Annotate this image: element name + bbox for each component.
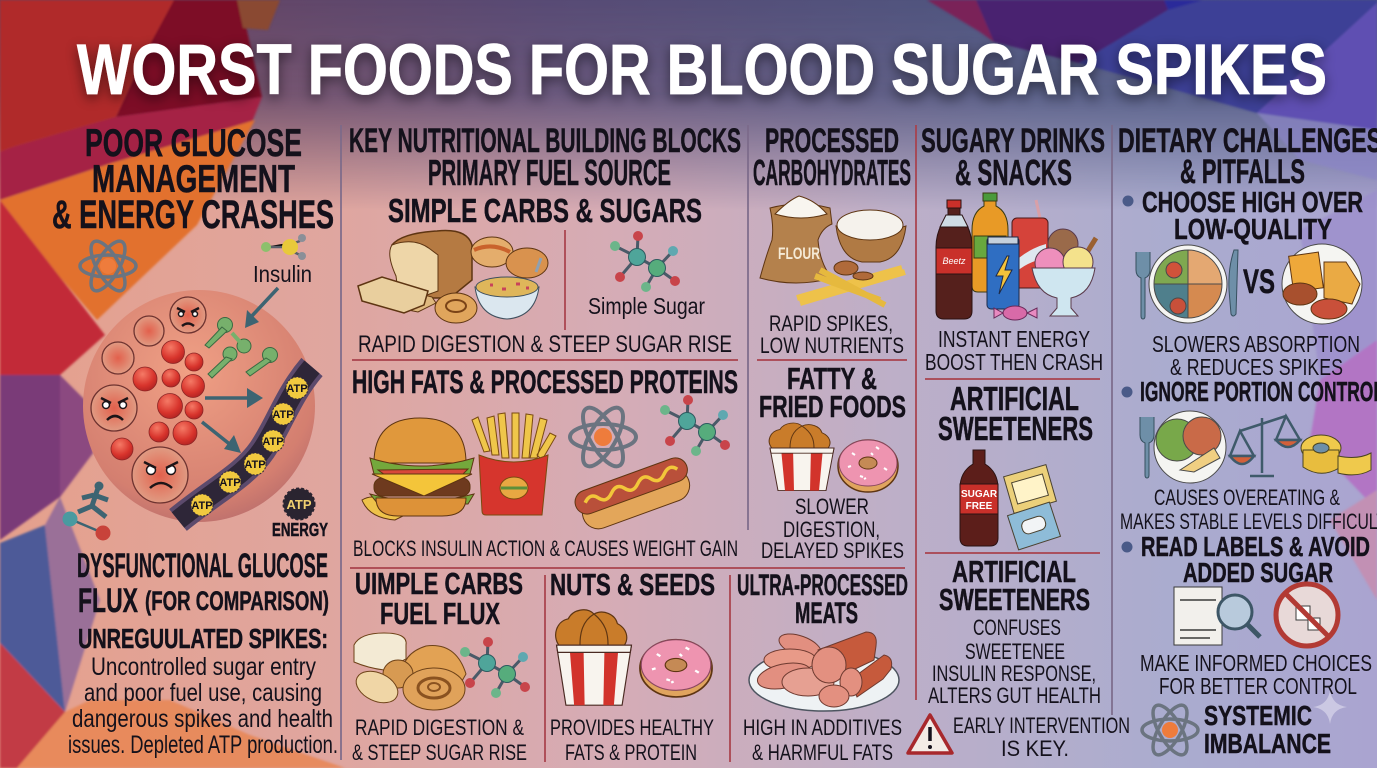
text: INSTANT ENERGY [938, 326, 1090, 352]
panel: fatty and fried foods [759, 361, 906, 563]
heading: SWEETENERS [938, 410, 1093, 447]
text [550, 715, 714, 765]
icon: sugar free bottle [960, 450, 998, 546]
heading: artificial sweeteners 2: ARTIFICIAL [952, 554, 1076, 589]
callout: early intervention: IS KEY. [1001, 736, 1069, 761]
icon: orange soda [972, 193, 1008, 292]
heading: key nutritional: SIMPLE CARBS & SUGARS [388, 192, 702, 229]
text: SLOWER [795, 494, 869, 519]
text: & STEEP SUGAR RISE [352, 740, 527, 765]
panel: sugary drinks and snacks [921, 122, 1105, 375]
icon: bucket [769, 423, 834, 491]
icon: molecule [660, 395, 730, 456]
panel: key nutritional building blocks [349, 122, 741, 561]
heading: ULTRA-PROCESSED [737, 569, 908, 602]
heading: key nutritional [349, 122, 741, 229]
heading: & SNACKS [955, 152, 1072, 193]
text: ALTERS GUT HEALTH [928, 683, 1101, 708]
icon: bread and pastries [358, 231, 548, 323]
icon: meat plate [749, 629, 899, 711]
heading: NUTS & SEEDS [550, 567, 715, 602]
text [928, 615, 1101, 708]
icon: atom [1142, 700, 1198, 760]
atp molecules [191, 377, 308, 516]
column dividers [341, 125, 1112, 762]
icon: pasta [797, 261, 905, 305]
text: DELAYED SPIKES [761, 538, 904, 563]
heading: FRIED FOODS [759, 389, 906, 424]
heading [737, 569, 908, 630]
heading [355, 566, 523, 631]
icon: red can [1012, 200, 1048, 288]
heading: poor glucose: POOR GLUCOSE [85, 122, 302, 165]
text: BOOST THEN CRASH [925, 349, 1103, 375]
text [743, 715, 902, 765]
heading: SUGARY DRINKS [921, 122, 1105, 160]
text: FATS & PROTEIN [565, 740, 697, 765]
icon: scale [1230, 416, 1300, 476]
arrows [202, 288, 278, 453]
diagram: glucose in bloodstream [83, 288, 315, 522]
icon: sweetener packets [1004, 465, 1060, 550]
icon: flour sack [760, 196, 832, 283]
icon: donut [640, 640, 712, 697]
label: vs: VS [1243, 263, 1275, 301]
icon: label and magnifier [1174, 587, 1260, 645]
text: LOW NUTRIENTS [760, 333, 904, 358]
heading: MEATS [795, 597, 858, 630]
text [760, 311, 904, 358]
icon: ice cream [1032, 229, 1096, 316]
heading: high fats: HIGH FATS & PROCESSED PROTEINS [352, 364, 738, 400]
heading: UIMPLE CARBS [355, 566, 523, 601]
heading: & PITFALLS [1180, 153, 1305, 191]
icon: chicken bucket [556, 610, 631, 705]
text: CARBOHYDRATES [753, 152, 911, 193]
callout: systemic imbalance: SYSTEMIC [1204, 700, 1312, 731]
icon: molecule [460, 637, 530, 698]
heading: key nutritional: PRIMARY FUEL SOURCE [428, 152, 671, 193]
text: & HARMFUL FATS [752, 740, 893, 765]
angry faces [101, 308, 199, 488]
icon: cola bottle [936, 200, 972, 319]
text [352, 715, 527, 765]
text [761, 494, 904, 563]
glucose balls [111, 340, 204, 460]
heading: FUEL FLUX [380, 596, 500, 631]
icon: burger [362, 418, 474, 520]
subheading: read labels [1122, 531, 1370, 588]
panel: dietary challenges [1118, 122, 1377, 760]
icon: insulin molecule [261, 234, 306, 260]
panel: uimple carbs fuel flux [351, 566, 530, 765]
callout: early intervention: EARLY INTERVENTION [953, 713, 1130, 738]
icon: tape measure [1301, 435, 1371, 475]
callout: systemic imbalance [1204, 700, 1331, 759]
heading: key nutritional: KEY NUTRITIONAL BUILDING BLOCKS [349, 122, 741, 160]
icon: knife [1229, 250, 1238, 316]
text [1152, 331, 1360, 380]
heading [921, 122, 1105, 193]
icon: atom [570, 402, 636, 472]
icon: pastries [351, 633, 466, 710]
text: CONFUSES [973, 615, 1061, 640]
icon: salad plate [1154, 411, 1226, 483]
icon: runner [62, 482, 110, 540]
text [1120, 485, 1377, 534]
heading: FATTY & [787, 361, 877, 396]
panel: artificial sweeteners [928, 380, 1101, 708]
text: unregulated spikes [68, 623, 338, 759]
icon: atom [80, 236, 136, 296]
icon: processed food plate [1282, 244, 1362, 324]
icon: atp energy badge [284, 488, 314, 520]
icon: rice bowl [836, 210, 906, 262]
insulin keys [205, 318, 278, 378]
text [1140, 650, 1372, 699]
icon: warning triangle [908, 715, 952, 753]
heading: dysfunctional glucose flux: FLUX [78, 582, 138, 620]
icon: sugar free bottle: FREE [966, 501, 993, 512]
heading: dysfunctional glucose flux [77, 547, 329, 620]
heading: dysfunctional glucose flux: DYSFUNCTIONAL GLUCOSE [77, 547, 328, 585]
text: RAPID SPIKES, [769, 311, 893, 336]
text: blocks insulin: BLOCKS INSULIN ACTION & CAUSES WEIGHT GAIN [353, 536, 738, 561]
blood vessel [178, 367, 312, 520]
icon: hot dog [572, 455, 697, 534]
icon: flour sack: FLOUR [778, 244, 820, 263]
icon: fork [1140, 417, 1154, 478]
text: unregulated spikes: UNREGUULATED SPIKES: [78, 623, 328, 654]
icon: fork [1136, 252, 1150, 319]
heading: artificial sweeteners 2: SWEETENERS [939, 582, 1090, 617]
icon: sparkle [1313, 690, 1347, 724]
icon: atp energy badge: ATP [286, 497, 312, 512]
heading: ARTIFICIAL [950, 380, 1079, 417]
text [925, 326, 1103, 375]
heading: PROCESSED [765, 122, 899, 160]
label: insulin: Insulin [253, 261, 312, 287]
icon: no sugar [1276, 584, 1338, 646]
icon: cola bottle: Beetz [942, 256, 966, 266]
icon: sugar free bottle: SUGAR [961, 489, 998, 500]
heading: poor glucose [52, 122, 334, 237]
subheading: choose high over low-quality: LOW-QUALITY [1174, 214, 1332, 246]
text: INSULIN RESPONSE, [932, 661, 1096, 686]
text: unregulated spikes: Uncontrolled sugar entry [91, 653, 316, 681]
icon: candy [994, 306, 1037, 320]
heading: dysfunctional glucose flux: (FOR COMPARISON) [145, 586, 329, 616]
icon: donut [838, 440, 898, 492]
heading: artificial sweeteners 2 [939, 554, 1090, 617]
text: PROVIDES HEALTHY [550, 715, 714, 740]
heading [759, 361, 906, 424]
label: energy: ENERGY [272, 520, 328, 540]
panel: ultra-processed meats [737, 569, 908, 765]
label: simple sugar: Simple Sugar [588, 293, 705, 319]
heading: poor glucose: MANAGEMENT [92, 158, 295, 201]
heading [938, 380, 1093, 447]
text: SWEETENEE [965, 639, 1065, 664]
icon: fries [472, 413, 556, 515]
text: unregulated spikes: dangerous spikes and health [72, 705, 333, 733]
panel: poor glucose management [52, 122, 338, 759]
icon: healthy plate [1149, 245, 1227, 323]
heading [1118, 122, 1377, 191]
panel: processed carbohydrates [753, 122, 911, 358]
text: HIGH IN ADDITIVES [743, 715, 902, 740]
text: rapid digestion: RAPID DIGESTION & STEEP SUGAR RISE [358, 331, 732, 358]
heading [753, 122, 911, 193]
icon: energy can [987, 237, 1019, 309]
damaged cells [91, 297, 206, 503]
icon: sugar molecule [610, 231, 680, 292]
callout: systemic imbalance: IMBALANCE [1204, 728, 1331, 759]
text: unregulated spikes: issues. Depleted ATP production. [68, 731, 338, 759]
heading: poor glucose: & ENERGY CRASHES [52, 193, 334, 237]
text: DIGESTION, [783, 517, 880, 542]
text: RAPID DIGESTION & [355, 715, 524, 740]
text: unregulated spikes: and poor fuel use, causing [84, 679, 322, 707]
subheading: choose high over low-quality [1122, 187, 1363, 246]
panel: nuts and seeds [550, 567, 715, 765]
callout: early intervention [953, 713, 1130, 761]
